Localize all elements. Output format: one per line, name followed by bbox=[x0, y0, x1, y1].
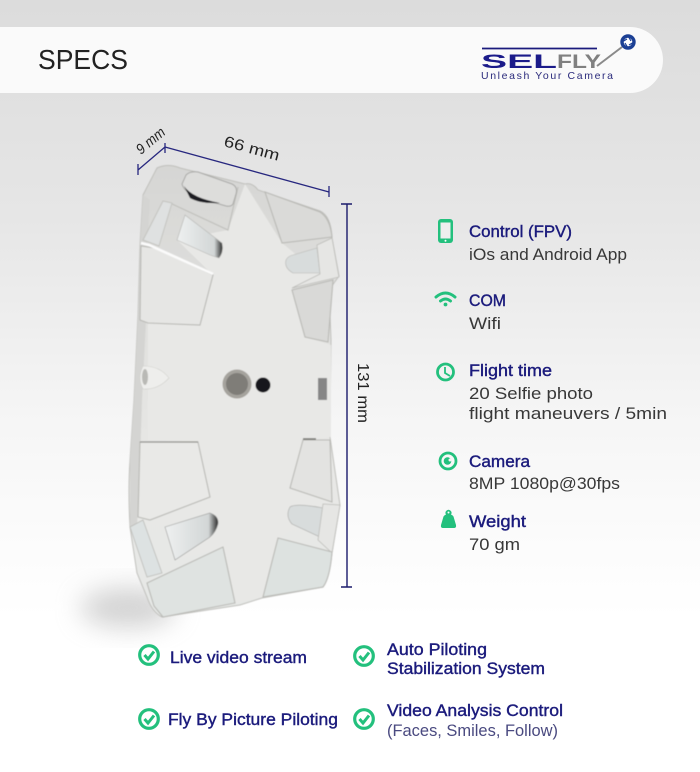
icon: check bbox=[355, 710, 373, 728]
spec: com: COM bbox=[469, 292, 506, 310]
spec: weight: 70 gm bbox=[469, 536, 520, 554]
lower left arm panel bbox=[138, 442, 210, 520]
lower left bracket bbox=[130, 520, 162, 577]
central cross highlight bbox=[148, 184, 331, 603]
spec: camera: 8MP 1080p@30fps bbox=[469, 475, 620, 493]
dimension: 66 mm bbox=[165, 133, 329, 197]
spec: weight: Weight bbox=[469, 513, 526, 531]
spec: control: iOs and Android App bbox=[469, 246, 627, 264]
feature: auto piloting: Stabilization System bbox=[387, 660, 545, 678]
top right panel bbox=[265, 192, 332, 243]
right side notch bbox=[318, 378, 327, 400]
spec: camera bbox=[440, 453, 620, 493]
optical flow camera bbox=[256, 378, 270, 392]
feature: video analysis control: Video Analysis Control bbox=[387, 702, 563, 720]
spec: com: Wifi bbox=[469, 315, 501, 333]
dimension: 131 mm bbox=[341, 204, 371, 587]
upper left motor window bbox=[177, 215, 223, 258]
upper right arm panel bbox=[292, 280, 333, 342]
icon: lens bbox=[440, 453, 456, 469]
spec: com bbox=[436, 292, 506, 333]
phone shadow bbox=[80, 588, 176, 628]
spec: flight time bbox=[438, 362, 667, 423]
product photo: Selfly phone case bbox=[129, 166, 340, 617]
left side bump bbox=[140, 366, 169, 389]
dimension: 9 mm: 9 mm bbox=[133, 125, 169, 158]
spec: flight time: flight maneuvers / 5min bbox=[469, 405, 667, 423]
spec: control bbox=[438, 219, 627, 264]
bottom left panel bbox=[147, 547, 235, 617]
dimension: 131 mm: 131 mm bbox=[354, 363, 371, 423]
icon: kettle weight bbox=[441, 510, 456, 528]
bottom right panel bbox=[263, 538, 332, 597]
ultrasonic sensor bbox=[222, 370, 252, 398]
icon: check bbox=[355, 647, 373, 665]
feature: auto piloting: Auto Piloting bbox=[387, 641, 487, 659]
lower left motor window bbox=[165, 513, 218, 560]
upper right bracket bbox=[292, 238, 339, 288]
feature: live video stream: Live video stream bbox=[170, 649, 307, 667]
lower right arm panel bbox=[290, 440, 332, 502]
lower right motor window bbox=[288, 505, 323, 537]
dimension: 9 mm bbox=[133, 125, 169, 175]
logo: Selfly: FLY bbox=[557, 52, 601, 73]
feature: live video stream bbox=[140, 646, 307, 667]
dimension: 66 mm: 66 mm bbox=[222, 133, 281, 165]
spec: control: Control (FPV) bbox=[469, 223, 572, 241]
spec: camera: Camera bbox=[469, 453, 531, 471]
feature: video analysis control bbox=[355, 702, 563, 740]
left side strip bbox=[130, 195, 150, 527]
icon: clock bbox=[438, 364, 454, 380]
icon: wifi bbox=[436, 293, 455, 306]
header bar bbox=[0, 27, 663, 93]
upper right motor window bbox=[286, 248, 320, 273]
oval slot panel bbox=[170, 172, 238, 230]
lower right bracket bbox=[318, 504, 340, 553]
logo: Selfly: Unleash Your Camera bbox=[481, 70, 613, 82]
icon: check bbox=[140, 710, 158, 728]
spec: weight bbox=[441, 510, 526, 554]
spec: flight time: 20 Selfie photo bbox=[469, 385, 593, 403]
feature: auto piloting bbox=[355, 641, 545, 678]
logo: Selfly bbox=[481, 36, 634, 82]
upper left arm panel bbox=[140, 246, 213, 325]
spec: flight time: Flight time bbox=[469, 362, 552, 380]
upper left bracket bbox=[141, 201, 213, 274]
icon: smartphone bbox=[438, 219, 453, 243]
feature: video analysis control: (Faces, Smiles, Follow) bbox=[387, 722, 558, 740]
feature: fly by picture piloting: Fly By Picture Piloting bbox=[168, 711, 338, 729]
title: SPECS bbox=[38, 44, 128, 75]
icon: check bbox=[140, 646, 158, 664]
logo: Selfly: SEL bbox=[481, 52, 558, 73]
